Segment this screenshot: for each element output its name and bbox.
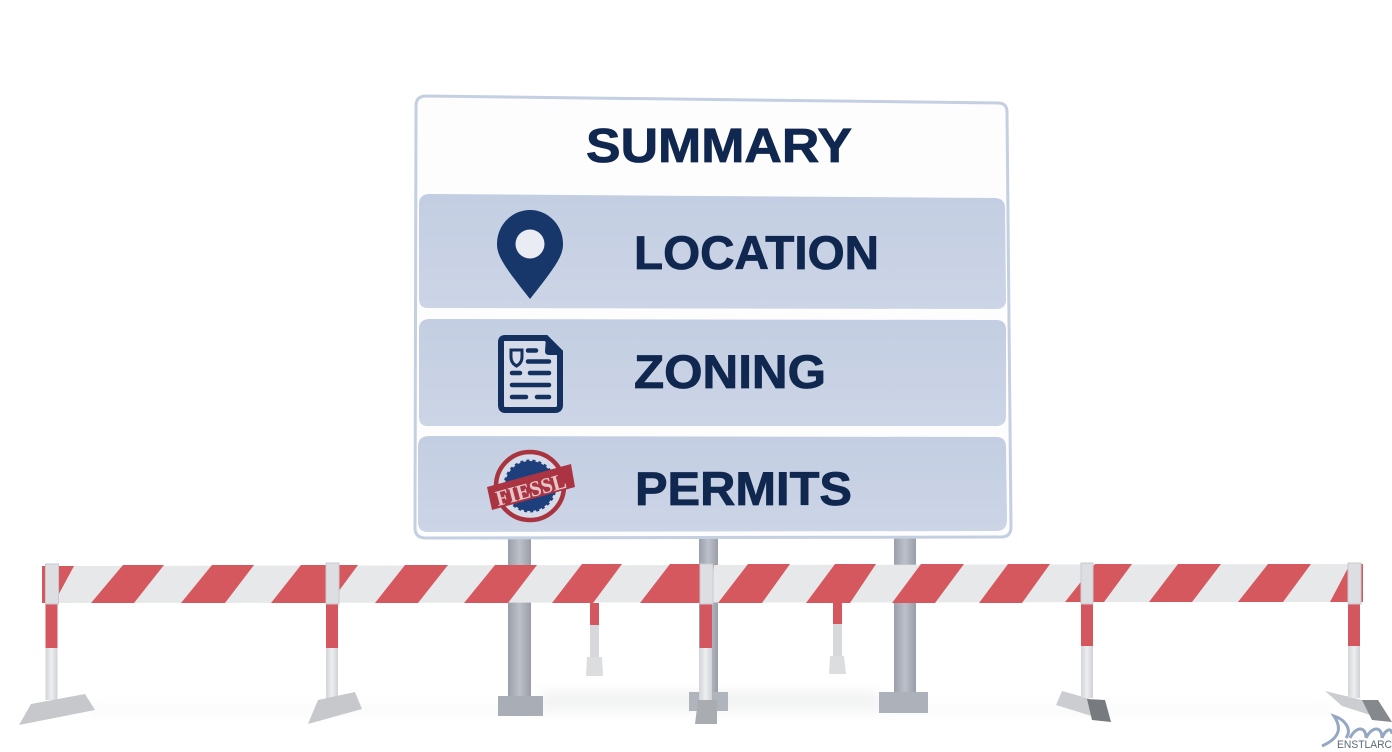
row: location	[419, 194, 1006, 309]
rear leg: right	[829, 603, 846, 674]
row: permits	[418, 436, 1007, 532]
watermark logo	[1322, 716, 1392, 751]
sign posts	[498, 538, 928, 716]
sign frame	[415, 96, 1011, 538]
label: location: LOCATION	[634, 226, 879, 279]
heading: SUMMARY	[586, 120, 852, 173]
leg 2	[308, 603, 362, 724]
label: zoning: ZONING	[634, 345, 826, 398]
icon: location pin	[497, 210, 563, 299]
icon: permit stamp: FIESSL	[493, 468, 569, 511]
post: left	[498, 538, 543, 716]
rear barricade legs	[586, 603, 846, 676]
post: right	[879, 538, 928, 713]
label: permits: PERMITS	[635, 462, 852, 515]
barrier plank	[42, 564, 1363, 603]
icon: document	[501, 338, 560, 410]
sign board	[415, 96, 1011, 538]
barricade legs	[19, 603, 1392, 725]
barricade	[19, 563, 1392, 725]
leg 3	[695, 603, 717, 724]
red stripes	[42, 564, 1363, 603]
leg 5	[1325, 603, 1392, 722]
icon: permit stamp	[487, 452, 575, 520]
row: zoning	[419, 319, 1006, 426]
post: centre	[689, 538, 728, 711]
posts clamps	[46, 563, 1361, 604]
leg 4	[1056, 603, 1111, 722]
ground shadow	[90, 692, 1330, 712]
leg 1	[19, 603, 95, 725]
rear leg: left	[586, 603, 603, 676]
